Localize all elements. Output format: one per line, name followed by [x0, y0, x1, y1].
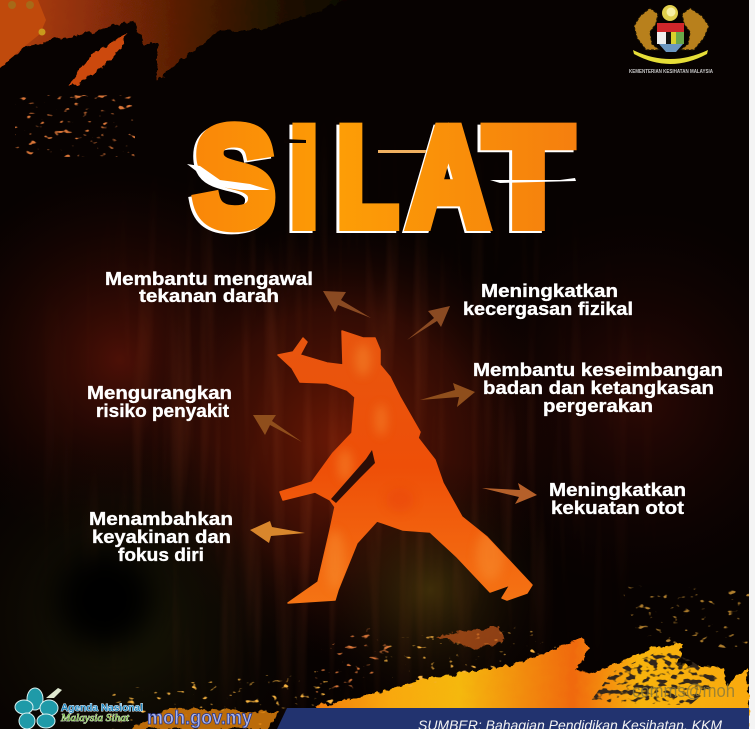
title white offset layer: S [191, 100, 272, 257]
bottom fire band [110, 585, 749, 729]
website: moh.gov.my: moh.gov.my [147, 708, 252, 729]
title white offset layer [191, 100, 569, 257]
text: Menambahkan keyakinan dan fokus diri: Menambahkan [89, 508, 233, 529]
title white offset layer: T [482, 100, 569, 257]
icon: left tiger [634, 8, 660, 50]
title orange layer: A [408, 98, 489, 255]
title white offset layer: I [287, 100, 315, 257]
text: Membantu keseimbangan badan dan ketangkasan pergerakan [473, 359, 723, 416]
text: Meningkatkan kekuatan otot: Meningkatkan [549, 479, 686, 500]
text: Membantu mengawal tekanan darah [105, 268, 313, 306]
arrow: to keyakinan [250, 521, 305, 543]
arrow: to risiko penyakit [253, 415, 302, 442]
watermark: comms@moh: comms@moh [632, 681, 735, 701]
agenda text: Agenda Nasional [61, 702, 143, 714]
title orange layer: I [290, 98, 318, 255]
text: Meningkatkan kecergasan fizikal: kecergasan fizikal [463, 298, 633, 319]
icon: crescent and star [662, 5, 678, 21]
text: Menambahkan keyakinan dan fokus diri: fokus diri [118, 544, 204, 565]
text: Mengurangkan risiko penyakit: Mengurangkan [87, 382, 232, 403]
title tears [187, 139, 576, 190]
icon: shield [657, 23, 684, 52]
title white offset layer: L [334, 100, 395, 257]
text: Membantu keseimbangan badan dan ketangkasan pergerakan: pergerakan [543, 395, 653, 416]
text: Meningkatkan kekuatan otot [549, 479, 686, 518]
text: Meningkatkan kecergasan fizikal [463, 280, 633, 319]
text: Mengurangkan risiko penyakit [87, 382, 232, 421]
title orange layer: S [194, 98, 275, 255]
title orange layer: T [485, 98, 572, 255]
logo: Malaysian coat of arms [629, 5, 713, 75]
arrow: to keseimbangan [420, 383, 475, 407]
arrow: to kecergasan fizikal [407, 306, 450, 340]
text: Membantu keseimbangan badan dan ketangkasan pergerakan: badan dan ketangkasan [483, 377, 714, 398]
arrow: to tekanan darah [323, 291, 371, 318]
text: Membantu mengawal tekanan darah: Membantu mengawal [105, 268, 313, 289]
title orange layer: L [337, 98, 398, 255]
title orange layer [194, 98, 572, 255]
logo: Agenda Nasional Malaysia Sihat [15, 688, 143, 729]
footer banner: source [277, 708, 749, 729]
title: SILAT [187, 98, 576, 257]
icon: hibiscus flower [15, 688, 62, 729]
belt end [331, 450, 375, 503]
malaysia sihat text: Malaysia Sihat [60, 712, 130, 724]
ministry name: KEMENTERIAN KESIHATAN MALAYSIA [629, 69, 713, 75]
arrow: to kekuatan otot [482, 483, 537, 504]
text: Meningkatkan kecergasan fizikal: Meningkatkan [481, 280, 618, 301]
silhouette: silat fighter [278, 331, 532, 603]
text: Meningkatkan kekuatan otot: kekuatan otot [551, 497, 684, 518]
flame highlights [325, 344, 504, 590]
top-left fire splashes [0, 0, 380, 157]
text: Mengurangkan risiko penyakit: risiko penyakit [96, 400, 229, 421]
icon: motto ribbon [633, 50, 708, 64]
text: Membantu keseimbangan badan dan ketangkasan pergerakan: Membantu keseimbangan [473, 359, 723, 380]
text: Membantu mengawal tekanan darah: tekanan darah [139, 285, 279, 306]
text: Menambahkan keyakinan dan fokus diri [89, 508, 233, 565]
title white offset layer: A [406, 100, 487, 257]
icon: right tiger [680, 8, 709, 50]
text: Menambahkan keyakinan dan fokus diri: keyakinan dan [92, 526, 231, 547]
